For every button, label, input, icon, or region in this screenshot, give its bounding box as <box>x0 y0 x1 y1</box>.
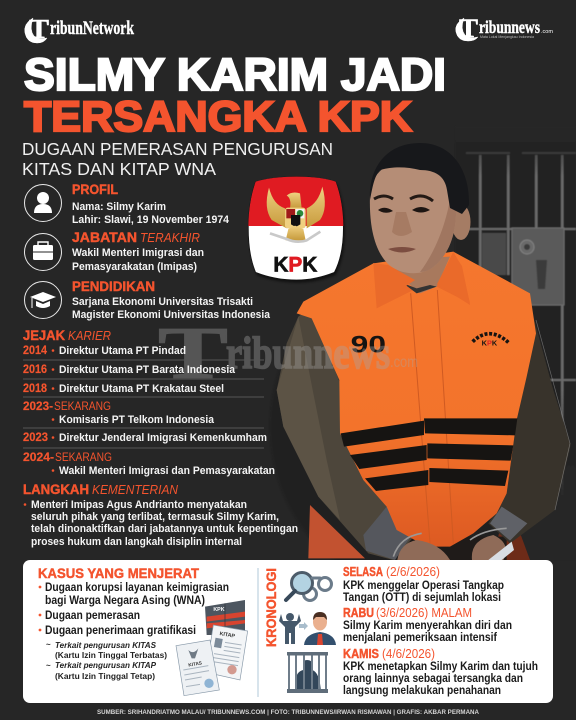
logo: Tribun Network: ribunNetwork <box>50 18 134 39</box>
subtitle <box>22 139 333 179</box>
watermark: Tribunnews.com: T <box>158 313 228 395</box>
subtitle: KITAS DAN KITAP WNA <box>22 159 216 179</box>
panel: langkah kementerian: seluruh pihak yang terlibat, termasuk Silmy Karim, <box>31 511 279 523</box>
text block: kasus list: Terkait pengurusan KITAS <box>55 640 156 650</box>
heading: kasus yang menjerat: KASUS YANG MENJERAT <box>38 565 199 581</box>
watermark: Tribunnews.com: ribunnews <box>226 327 390 378</box>
vest <box>297 252 536 547</box>
text block: rabu <box>343 606 512 644</box>
text block: kasus list: Terkait pengurusan KITAP <box>55 660 156 670</box>
text block: kamis: (4/6/2026) <box>382 647 435 661</box>
text block: kasus list: (Kartu Izin Tinggal Tetap) <box>55 671 155 681</box>
watermark: Tribunnews.com <box>158 313 418 395</box>
icon: jail <box>287 652 328 693</box>
panel: white card <box>23 560 553 703</box>
photo: Silmy Karim in orange vest <box>270 143 571 587</box>
text block: selasa: KPK menggelar Operasi Tangkap <box>343 580 504 592</box>
garuda emblem <box>267 187 325 242</box>
cuffs <box>363 507 411 560</box>
panel: jabatan terakhir: TERAKHIR <box>140 230 200 245</box>
heading: kronologi: KRONOLOGI <box>263 568 279 647</box>
text block: kasus list: bagi Warga Negara Asing (WNA) <box>45 595 205 607</box>
icon: magnifier and handcuffs <box>286 572 332 600</box>
logo: Tribun Network: T <box>29 14 49 44</box>
icon: briefcase <box>24 234 62 270</box>
panel: jejak karier: 2018 <box>23 383 48 395</box>
panel: profil: PROFIL <box>72 182 118 197</box>
panel: langkah kementerian: KEMENTERIAN <box>92 482 179 497</box>
panel: jejak karier: 2024- <box>23 452 54 464</box>
text block: rabu: menjalani pemeriksaan intensif <box>343 632 497 644</box>
panel: jejak karier: KARIER <box>68 328 111 343</box>
panel: pendidikan: Magister Ekonomi Universitas Indonesia <box>72 309 271 321</box>
panel: jejak karier: Direktur Utama PT Krakatau Steel <box>59 383 224 395</box>
panel: jabatan terakhir: Wakil Menteri Imigrasi dan <box>72 247 204 259</box>
text block: selasa: SELASA <box>343 565 383 579</box>
neck <box>393 257 450 293</box>
text block: kasus list: Dugaan penerimaan gratifikasi <box>45 625 196 637</box>
panel: langkah kementerian: Menteri Imipas Agus Andrianto menyatakan <box>31 499 247 511</box>
title <box>24 49 446 141</box>
text block: kamis: KAMIS <box>343 647 379 661</box>
lower garment <box>308 505 365 558</box>
panel: jejak karier: JEJAK <box>23 328 65 343</box>
panel: profil: Lahir: Slawi, 19 November 1974 <box>72 214 230 226</box>
logo: Tribunnews: ribunnews <box>479 17 540 37</box>
icon: graduation cap <box>24 282 62 318</box>
panel: pendidikan: Sarjana Ekonomi Universitas Trisakti <box>72 296 253 308</box>
panel: jejak karier: Komisaris PT Telkom Indonesia <box>59 414 215 426</box>
panel: langkah kementerian <box>23 482 298 548</box>
text block: kamis: orang lainnya sebagai tersangka dan <box>343 673 523 685</box>
text block: kamis: langsung melakukan penahanan <box>343 685 501 697</box>
text block: selasa: (2/6/2026) <box>386 565 440 579</box>
panel: jabatan terakhir: JABATAN <box>72 230 137 245</box>
panel: jejak karier: Direktur Jenderal Imigrasi Kemenkumham <box>59 432 267 444</box>
KPK logo <box>248 177 345 283</box>
text block: kamis: KPK menetapkan Silmy Karim dan tujuh <box>343 661 538 673</box>
text block: kasus list: ~ <box>46 661 51 670</box>
panel: langkah kementerian: LANGKAH <box>23 482 89 497</box>
panel: pendidikan: PENDIDIKAN <box>72 279 155 294</box>
panel: jabatan terakhir <box>24 230 204 273</box>
text block: selasa <box>343 565 504 604</box>
left sleeve <box>277 308 417 560</box>
panel: langkah kementerian: proses hukum dan langkah disiplin internal <box>31 536 242 548</box>
icon: KPK building and documents <box>176 600 248 696</box>
text block: kasus list: (Kartu Izin Tinggal Terbatas) <box>55 650 167 660</box>
title: TERSANGKA KPK <box>24 93 412 141</box>
text block: kasus list: ~ <box>46 640 51 649</box>
vest badge <box>473 334 509 347</box>
panel: profil: Nama: Silmy Karim <box>72 201 166 213</box>
panel: jejak karier: 2023- <box>23 401 53 413</box>
icon: KPK building and documents: KPK <box>213 607 225 613</box>
text block: rabu: RABU <box>343 606 374 620</box>
panel: jejak karier <box>23 328 275 477</box>
text block: rabu: Silmy Karim menyerahkan diri dan <box>343 620 512 632</box>
text block: kamis <box>343 647 538 697</box>
panel: jejak karier: Direktur Utama PT Pindad <box>59 345 186 357</box>
panel: jejak karier: Wakil Menteri Imigrasi dan Pemasyarakatan <box>59 465 275 477</box>
text block: selasa: Tangan (OTT) di sejumlah lokasi <box>343 592 501 604</box>
text block: kasus list: Dugaan korupsi layanan keimigrasian <box>45 582 229 594</box>
background: jail bars <box>455 126 576 560</box>
KPK logo: KPK <box>273 253 318 277</box>
panel: profil <box>24 182 230 226</box>
logo: Tribunnews: T <box>459 14 478 43</box>
panel: langkah kementerian: telah dinonaktifkan dari jabatannya untuk kepentingan <box>31 523 298 535</box>
collar <box>373 253 470 305</box>
footer credits: SUMBER: SRIHANDRIATMO MALAU/ TRIBUNNEWS.COM | FOTO: TRIBUNNEWS/IRWAN RISMAWAN | GRAFIS: AKBAR PERMANA <box>97 709 479 716</box>
panel: jejak karier: 2023 <box>23 432 48 444</box>
panel: jabatan terakhir: Pemasyarakatan (Imipas) <box>72 261 197 273</box>
panel: jejak karier: SEKARANG <box>54 401 111 413</box>
text block: kasus list: Dugaan pemerasan <box>45 610 140 622</box>
text block: kasus list <box>39 582 229 681</box>
icon: surrender and official <box>279 612 336 645</box>
logo: Tribunnews: .com <box>541 29 553 35</box>
head <box>370 143 470 273</box>
document: kitap: KITAP <box>219 631 236 640</box>
panel: jejak karier: 2014 <box>23 345 48 357</box>
vest badge: KPK <box>482 338 498 347</box>
panel: jejak karier: Direktur Utama PT Barata Indonesia <box>59 364 236 376</box>
text block: rabu: (3/6/2026) MALAM <box>376 606 472 620</box>
logo: Tribunnews: Mata Lokal Menjangkau Indonesia <box>480 35 534 39</box>
panel: jejak karier: SEKARANG <box>55 452 112 464</box>
panel: jejak karier: 2016 <box>23 364 47 376</box>
logo: Tribunnews <box>456 14 553 43</box>
watermark: Tribunnews.com: .com <box>390 354 418 371</box>
hands <box>397 540 450 560</box>
vest number: 90 <box>351 332 386 359</box>
logo: Tribun Network <box>25 14 134 44</box>
icon: person <box>24 184 62 222</box>
document: kitas: KITAS <box>188 660 202 668</box>
black stripes <box>341 421 424 447</box>
title: SILMY KARIM JADI <box>24 49 446 100</box>
right sleeve <box>488 317 571 543</box>
panel: pendidikan <box>24 279 271 321</box>
subtitle: DUGAAN PEMERASAN PENGURUSAN <box>22 139 333 159</box>
